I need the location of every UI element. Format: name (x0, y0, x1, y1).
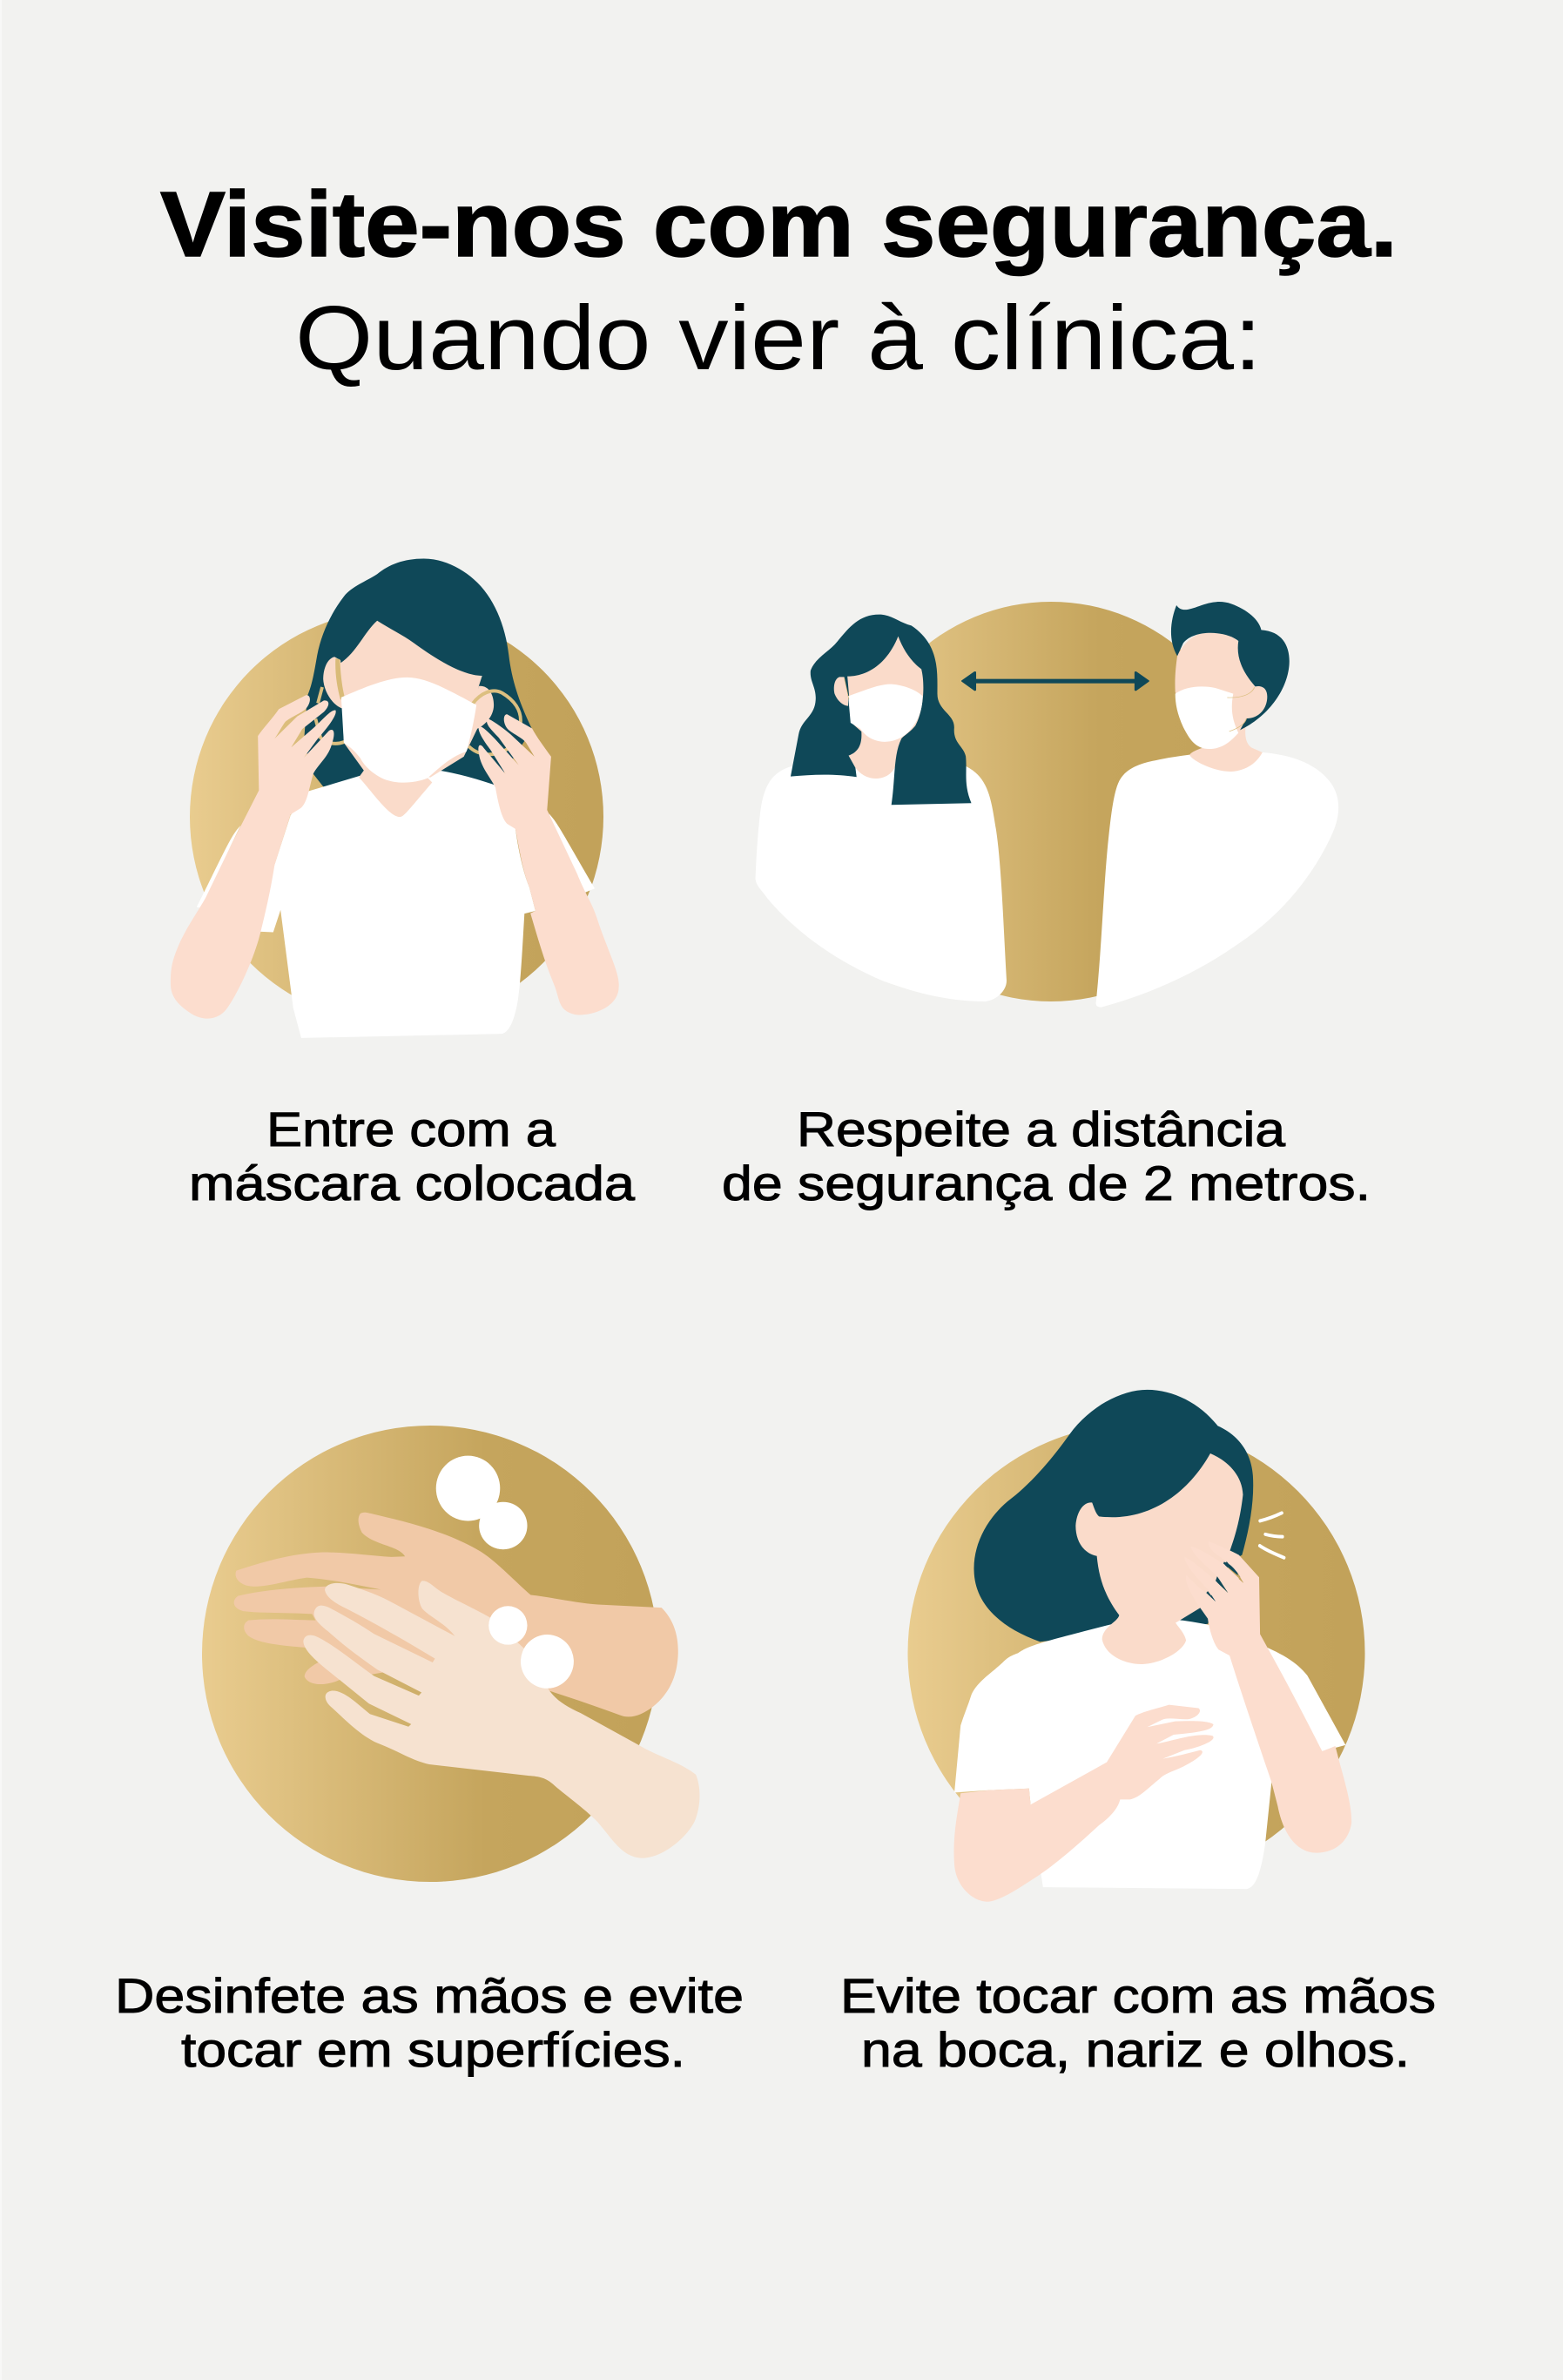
heading: light line: Quando vier à clínica: (295, 287, 1262, 389)
caption: mask: máscara colocada (189, 1156, 636, 1210)
heading: bold line: Visite-nos com segurança. (160, 173, 1398, 276)
caption: distance (722, 1102, 1371, 1210)
caption: mask: Entre com a (266, 1102, 556, 1156)
caption: mask (189, 1102, 636, 1210)
panel: disinfect hands (115, 1426, 744, 2077)
caption: do not touch (840, 1968, 1436, 2077)
panel: do not touch face (840, 1390, 1436, 2077)
icon: irritation sparks (1260, 1513, 1284, 1558)
panel: mask (171, 559, 636, 1210)
illustration: hands with soap bubbles (234, 1456, 699, 1858)
gold circle (852, 602, 1250, 1001)
title (160, 173, 1398, 389)
caption: disinfect (115, 1968, 744, 2077)
illustration: man wearing a mask (1096, 602, 1338, 1008)
caption: disinfect: Desinfete as mãos e evite (115, 1968, 744, 2023)
illustration: woman touching her face (953, 1390, 1351, 1902)
arrow: two-way distance (962, 672, 1148, 690)
caption: distance: Respeite a distância (797, 1102, 1286, 1156)
caption: distance: de segurança de 2 metros. (722, 1156, 1371, 1210)
icon: soap bubbles (436, 1456, 574, 1689)
gold circle (907, 1425, 1365, 1881)
illustration: woman putting on a mask (171, 559, 619, 1038)
caption: disinfect: tocar em superfícies. (181, 2022, 685, 2077)
caption: do not touch: na boca, nariz e olhos. (861, 2022, 1410, 2077)
panel: distance (722, 602, 1371, 1210)
caption: do not touch: Evite tocar com as mãos (840, 1968, 1436, 2023)
gold circle (202, 1426, 658, 1882)
illustration: woman wearing a mask (756, 615, 1007, 1001)
gold circle (190, 610, 603, 1024)
